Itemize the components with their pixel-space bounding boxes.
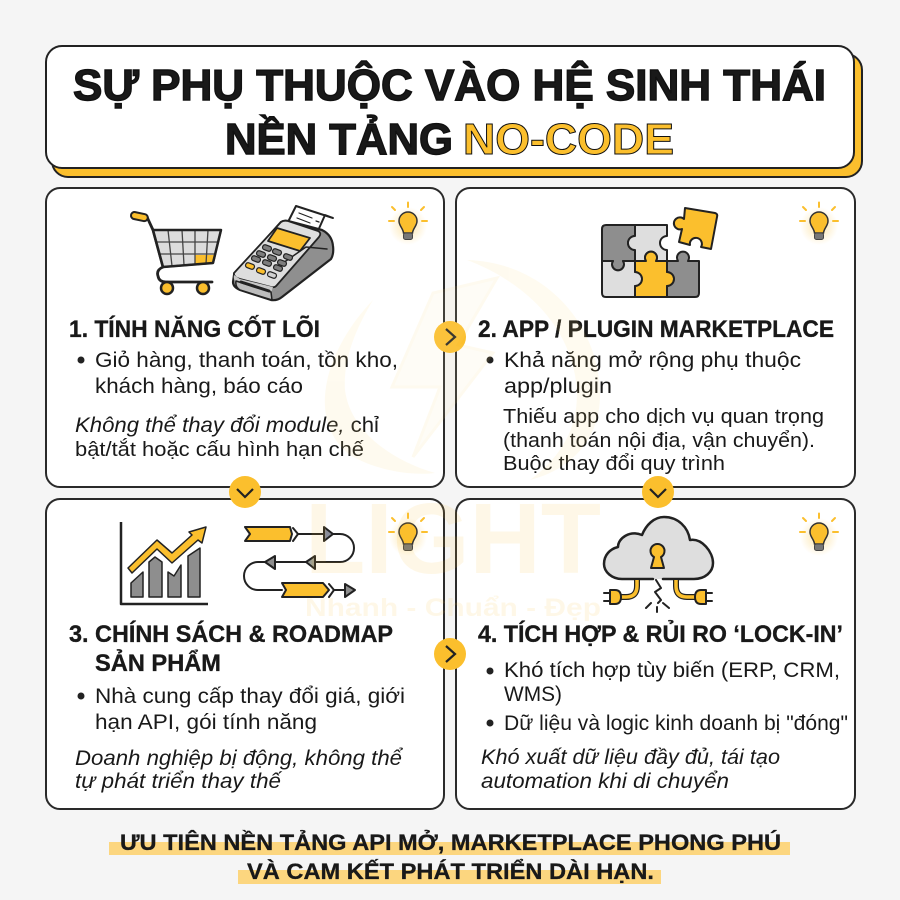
- bullet text: Nhà cung cấp thay đổi giá, giới: [95, 685, 405, 708]
- bullet text: khách hàng, báo cáo: [95, 375, 303, 398]
- arrow: card 3 to 4: [434, 638, 466, 670]
- bullet text: WMS): [504, 683, 562, 706]
- arrow: card 2 to 4: [642, 476, 674, 508]
- note text: [481, 746, 780, 793]
- title panel: [46, 46, 862, 177]
- heading 1: 1. TÍNH NĂNG CỐT LÕI: [69, 315, 320, 343]
- note text: (thanh toán nội địa, vận chuyển).: [503, 430, 815, 452]
- heading 4: 4. TÍCH HỢP & RỦI RO ‘LOCK-IN’: [478, 619, 843, 648]
- icon: idea bulb: [389, 514, 427, 556]
- bullet text: Dữ liệu và logic kinh doanh bị "đóng": [504, 712, 848, 735]
- note text: automation khi di chuyển: [481, 770, 729, 793]
- note text: Buộc thay đổi quy trình: [503, 453, 725, 475]
- bullet text: Khó tích hợp tùy biến (ERP, CRM,: [504, 659, 840, 682]
- note text: Thiếu app cho dịch vụ quan trọng: [503, 406, 824, 428]
- heading 3: 3. CHÍNH SÁCH & ROADMAP: [69, 620, 393, 648]
- bullet text: Khả năng mở rộng phụ thuộc: [504, 349, 801, 372]
- note text: Không thể thay đổi module, chỉ: [75, 414, 379, 437]
- icon: growth chart: [121, 522, 208, 604]
- watermark logo: Nhanh - Chuẩn - Đẹp: [305, 594, 601, 622]
- icon: roadmap flow: [244, 527, 355, 597]
- bullet text: app/plugin: [504, 375, 612, 398]
- note text: [75, 414, 379, 461]
- note text: tự phát triển thay thế: [75, 770, 282, 793]
- panel: card 1 core features: [46, 188, 444, 487]
- note text: bật/tắt hoặc cấu hình hạn chế: [75, 438, 364, 461]
- note text: [75, 747, 403, 793]
- icon: idea bulb: [389, 202, 427, 245]
- footer takeaway: ƯU TIÊN NỀN TẢNG API MỞ, MARKETPLACE PHONG PHÚ: [120, 830, 781, 855]
- panel: card 2 marketplace: [456, 188, 855, 487]
- bullet text: [486, 349, 801, 398]
- icon: idea bulb: [800, 202, 838, 245]
- icon: payment terminal: [233, 206, 333, 300]
- note text: [503, 406, 824, 475]
- watermark logo: LIGHT: [305, 483, 601, 595]
- icon: puzzle: [602, 208, 717, 297]
- arrow: card 1 to 2: [434, 321, 466, 353]
- heading 3: [69, 620, 393, 677]
- title text: SỰ PHỤ THUỘC VÀO HỆ SINH THÁI: [73, 59, 826, 110]
- note text: Doanh nghiệp bị động, không thể: [75, 747, 403, 770]
- footer takeaway: [109, 830, 790, 884]
- arrow: card 1 to 3: [229, 476, 261, 508]
- icon: shopping cart: [130, 211, 221, 294]
- bullet text: hạn API, gói tính năng: [95, 711, 317, 734]
- icon: idea bulb: [800, 514, 838, 556]
- title text: [73, 59, 826, 164]
- bullet text: Giỏ hàng, thanh toán, tồn kho,: [95, 349, 398, 372]
- icon: locked cloud with plugs: [604, 517, 713, 612]
- bullet text: [486, 659, 848, 735]
- title text: NO-CODE: [463, 115, 674, 164]
- watermark logo: [305, 260, 601, 622]
- note text: Khó xuất dữ liệu đầy đủ, tái tạo: [481, 746, 780, 769]
- heading 2: 2. APP / PLUGIN MARKETPLACE: [478, 316, 834, 343]
- panel: card 3 policy roadmap: [46, 499, 444, 809]
- heading 3: SẢN PHẨM: [95, 648, 221, 677]
- title text: NỀN TẢNG: [225, 114, 453, 164]
- bullet text: [78, 685, 405, 734]
- bullet text: [78, 349, 398, 398]
- footer takeaway: VÀ CAM KẾT PHÁT TRIỂN DÀI HẠN.: [247, 859, 654, 884]
- panel: card 4 integration lock-in: [456, 499, 855, 809]
